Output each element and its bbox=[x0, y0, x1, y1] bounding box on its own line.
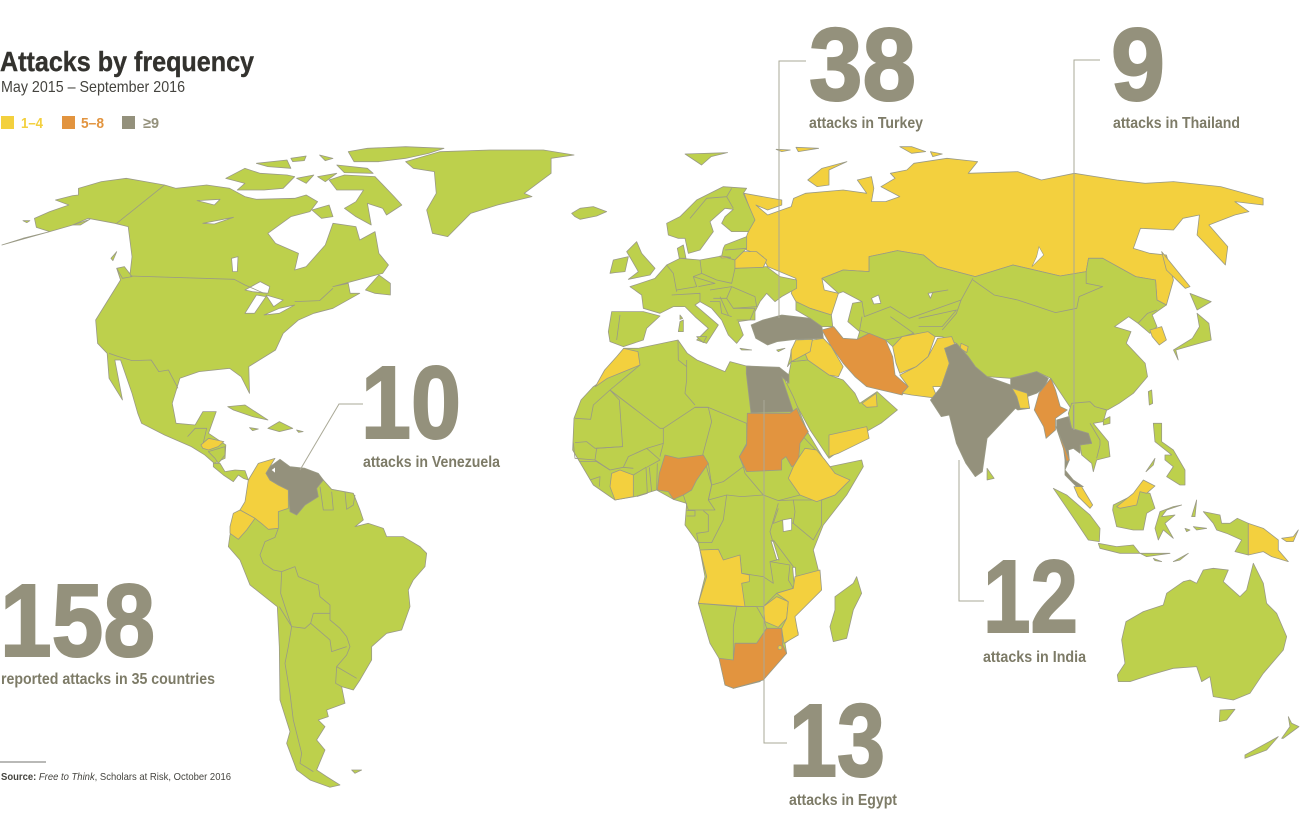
country: Nepal bbox=[960, 343, 968, 353]
country: Malaysia (Peninsula) bbox=[1074, 487, 1093, 508]
map: Africa bbox=[573, 340, 863, 688]
country: Ivory Coast bbox=[610, 470, 633, 500]
country: Mozambique bbox=[777, 570, 822, 643]
title: Attacks by frequency bbox=[0, 46, 254, 77]
leader line: India bbox=[959, 460, 984, 601]
callout: total attacks: reported attacks in 35 countries bbox=[1, 671, 215, 688]
island: New Zealand south bbox=[1245, 737, 1278, 758]
country: Iran bbox=[822, 327, 908, 395]
leader line: Turkey bbox=[779, 61, 806, 318]
country: UAE bbox=[862, 393, 877, 407]
legend: 1–4 bbox=[21, 115, 44, 132]
country: Syria bbox=[791, 339, 812, 362]
callout: Turkey: 38 bbox=[809, 7, 916, 122]
country: Swaziland bbox=[778, 646, 782, 650]
country: Morocco bbox=[595, 348, 640, 387]
country: Afghanistan bbox=[893, 332, 935, 373]
lakes bbox=[783, 518, 792, 532]
country: Nigeria bbox=[657, 455, 708, 499]
country: Myanmar bbox=[1034, 378, 1067, 438]
map: South America bbox=[208, 447, 427, 787]
legend: 5–8 bbox=[81, 115, 104, 132]
leader line: Thailand bbox=[1074, 60, 1100, 430]
callout: Egypt: attacks in Egypt bbox=[789, 792, 897, 809]
country: South Korea bbox=[1150, 327, 1166, 345]
callout: India: attacks in India bbox=[983, 649, 1086, 666]
country: Sri Lanka bbox=[987, 468, 994, 480]
callout: Egypt: 13 bbox=[789, 683, 885, 798]
country: New Britain bbox=[1282, 530, 1298, 542]
legend: ≥9 bbox=[143, 115, 159, 132]
map: Russia bbox=[685, 147, 1263, 315]
callout: Thailand bbox=[1111, 7, 1240, 132]
callout: total attacks: 158 bbox=[0, 563, 155, 678]
country: Egypt bbox=[746, 366, 793, 413]
callout: India: 12 bbox=[983, 539, 1078, 654]
source note: Source: Free to Think, Scholars at Risk, October 2016 bbox=[1, 771, 231, 783]
map: Asia bbox=[751, 251, 1211, 480]
map: North America and Greenland bbox=[2, 147, 574, 463]
island: New Zealand north bbox=[1282, 717, 1299, 738]
country: Ethiopia bbox=[788, 448, 850, 502]
country: Thailand bbox=[1057, 417, 1092, 487]
map: Europe bbox=[572, 187, 797, 352]
country: Bangladesh bbox=[1012, 388, 1030, 408]
country: Myanmar (south) bbox=[1056, 427, 1069, 462]
leader line: Venezuela bbox=[300, 404, 363, 470]
country: Papua New Guinea bbox=[1248, 523, 1288, 562]
legend bbox=[1, 115, 159, 132]
country: Belarus bbox=[735, 252, 767, 268]
country: South Africa bbox=[719, 628, 787, 688]
country: India bbox=[930, 343, 1048, 477]
country: Iraq bbox=[804, 338, 843, 377]
callout: Thailand: 9 bbox=[1111, 7, 1165, 122]
leader line: Egypt bbox=[764, 400, 787, 743]
country: Angola bbox=[698, 549, 749, 607]
callout: Turkey: attacks in Turkey bbox=[809, 115, 923, 132]
callout: Thailand: attacks in Thailand bbox=[1113, 115, 1240, 132]
subtitle: May 2015 – September 2016 bbox=[1, 79, 185, 96]
country: Malaysia (Borneo) bbox=[1117, 480, 1155, 508]
country: Kaliningrad bbox=[720, 256, 731, 258]
country: Pakistan bbox=[900, 337, 956, 398]
callout: Venezuela: attacks in Venezuela bbox=[363, 454, 500, 471]
country: Australia bbox=[1117, 563, 1287, 700]
island: Tasmania bbox=[1219, 709, 1235, 722]
callout: Venezuela: 10 bbox=[361, 345, 461, 460]
country: Turkey bbox=[751, 315, 823, 345]
country: Sudan bbox=[739, 408, 808, 472]
country: Zimbabwe bbox=[763, 597, 788, 627]
country: Yemen bbox=[829, 427, 869, 457]
map: Southeast Asia and Oceania bbox=[1053, 390, 1299, 758]
